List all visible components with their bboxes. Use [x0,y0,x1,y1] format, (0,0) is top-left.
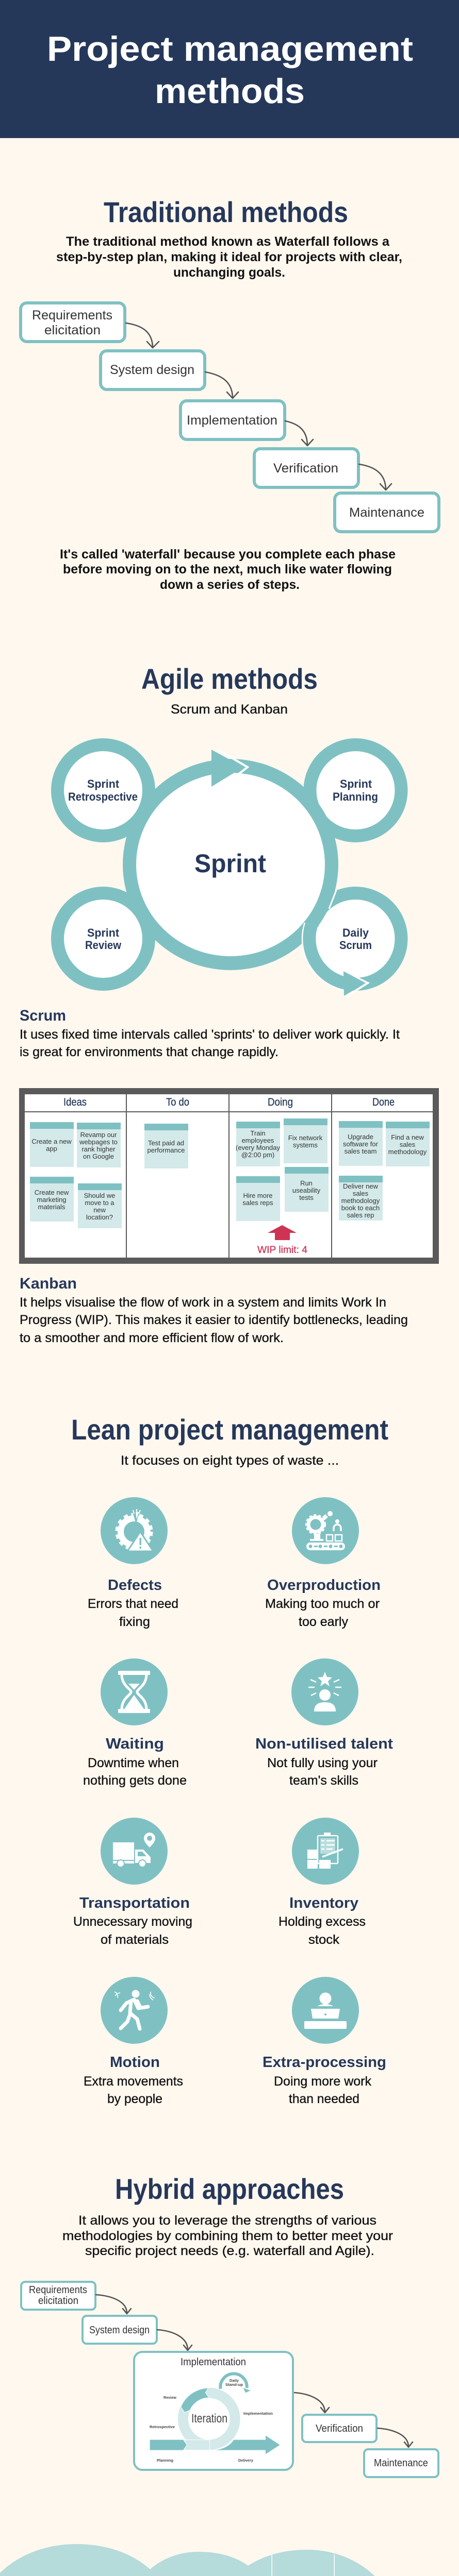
hybrid waterfall diagram: Maintenance [374,2458,428,2469]
call to action background: clouds and floor [0,2544,459,2576]
sprint cycle diagram: Scrum [339,939,372,952]
card: deliver methodology book: Deliver new [343,1182,379,1190]
waste: non-utilised talent: Not fully using your [267,1756,378,1770]
implementation panel: Implementation [243,2412,273,2416]
heading: kanban: Kanban [20,1275,77,1292]
sprint cycle diagram: Sprint [87,926,120,939]
text: waterfall intro: step-by-step plan, making it ideal for projects with clear, [56,250,402,264]
card: train employees: Train [250,1129,266,1137]
card: upgrade software [339,1121,383,1166]
text: hybrid description: methodologies by combining them to better meet your [62,2229,393,2243]
waste: non-utilised talent: Non-utilised talent [255,1736,393,1752]
waste: non-utilised talent: team's skills [289,1773,358,1788]
waste: motion: Motion [110,2054,160,2071]
card: usability tests [285,1167,329,1212]
waste: waiting: Waiting [106,1736,164,1752]
icon: person with star [291,1658,358,1725]
card: upgrade software: Upgrade [348,1133,373,1141]
text: waterfall intro: The traditional method known as Waterfall follows a [66,234,390,249]
waste: defects: Errors that need [88,1597,178,1611]
card: test paid ad: performance [147,1146,185,1154]
card: usability tests: Run [300,1179,313,1187]
card: train employees: employees [242,1137,274,1144]
kanban board: Ideas [63,1096,87,1108]
card: find sales methodology: methodology [388,1148,427,1156]
icon: clipboard and boxes [292,1818,359,1885]
card: train employees: (every Monday [236,1144,280,1151]
icon: broken gear with warning [101,1497,168,1564]
implementation panel: Stand-up [225,2383,243,2387]
implementation panel: Iteration [191,2412,227,2426]
text: kanban description: to a smoother and more efficient flow of work. [20,1331,284,1345]
waste: defects [88,1497,178,1629]
card: revamp webpages: webpages to [79,1138,118,1146]
waterfall diagram: System design [110,363,194,377]
waste: inventory: stock [308,1933,340,1947]
waste: overproduction: Overproduction [267,1577,381,1594]
card: fix network: systems [293,1141,318,1149]
title banner [0,0,459,138]
card: find sales methodology: Find a new [391,1133,424,1141]
text: hybrid description: specific project needs (e.g. waterfall and Agile). [85,2244,374,2258]
card: revamp webpages: Revamp our [80,1131,117,1139]
waste: motion: Extra movements [84,2074,183,2089]
card: usability tests: tests [299,1194,314,1201]
text: kanban description [20,1295,408,1345]
waste: overproduction: Making too much or [265,1597,380,1611]
waste: motion: by people [107,2092,162,2106]
waste: waiting [83,1658,187,1788]
subheading: eight types of waste: It focuses on eight types of waste ... [121,1453,339,1468]
sprint cycle diagram [51,738,407,996]
text: waterfall explanation: It's called 'waterfall' because you complete each phase [60,547,396,562]
text: hybrid description: It allows you to leverage the strengths of various [78,2213,376,2228]
waste: extra-processing: Extra-processing [263,2054,386,2071]
heading: lean project management: Lean project management [71,1413,388,1446]
waterfall diagram: Requirements [32,308,112,323]
card: find sales methodology [386,1122,430,1166]
kanban board: To do [166,1096,189,1108]
card: upgrade software: sales team [345,1147,376,1155]
card: test paid ad [144,1124,188,1168]
sprint cycle diagram: Planning [333,790,378,803]
icon: hourglass [101,1658,168,1725]
waste: extra-processing [263,1977,386,2106]
card: test paid ad: Test paid ad [148,1139,184,1147]
card: hire sales reps: Hire more [243,1192,273,1199]
card: upgrade software: software for [343,1140,379,1148]
hybrid waterfall diagram: System design [89,2325,150,2336]
icon: robot arm and conveyor [292,1497,359,1564]
implementation panel: Implementation [181,2357,246,2368]
icon: walking person [101,1977,168,2044]
waste: overproduction: too early [299,1615,348,1629]
sprint cycle diagram: Review [85,939,122,952]
icon: truck and pin [101,1818,168,1885]
card: deliver methodology book: book to each [341,1204,380,1212]
card: usability tests: useability [292,1187,321,1194]
card: hire sales reps [236,1176,280,1221]
waterfall diagram [21,303,439,532]
implementation panel: Planning [157,2459,173,2463]
sprint cycle diagram: Daily [342,926,369,939]
sprint cycle diagram: Sprint [87,777,120,790]
card: new location [78,1183,122,1228]
card: new location: Should we [84,1192,115,1199]
heading: scrum: Scrum [20,1007,66,1024]
card: revamp webpages: rank higher [81,1145,116,1153]
text: waterfall explanation: before moving on to the next, much like water flowing [63,562,392,577]
waste: transportation: of materials [101,1933,169,1947]
text: scrum description: is great for environments that change rapidly. [20,1045,278,1059]
card: create a new app: app [46,1145,57,1153]
card: find sales methodology: sales [400,1141,416,1148]
implementation panel: Retrospective [150,2426,175,2429]
waste: inventory: Inventory [289,1895,358,1911]
wip limit label: WIP limit: 4 [257,1245,307,1256]
implementation panel: Review [163,2396,177,2400]
sprint cycle diagram: Sprint [194,849,266,878]
waste: non-utilised talent [255,1658,393,1788]
waste: transportation: Transportation [79,1895,190,1911]
card: create a new app [30,1122,74,1167]
card: deliver methodology book: sales [353,1190,369,1197]
text: waterfall intro: unchanging goals. [173,265,285,280]
icon: person at laptop [292,1977,359,2044]
card: new location: location? [86,1213,113,1221]
waste: overproduction [265,1497,381,1629]
kanban board: Doing [268,1096,293,1108]
waste: extra-processing: Doing more work [274,2074,371,2089]
title banner: methods [155,72,305,111]
kanban board [19,1088,439,1264]
text: scrum description: It uses fixed time intervals called 'sprints' to deliver work quickly. It [20,1027,400,1042]
waste: transportation: Unnecessary moving [73,1914,192,1929]
text: waterfall explanation: down a series of steps. [160,578,300,592]
ceiling lamps [252,2554,356,2576]
waste: inventory [278,1818,366,1947]
waste: transportation [73,1818,192,1947]
text: waterfall intro [56,234,402,280]
card: fix network [284,1118,327,1163]
waste: inventory: Holding excess [278,1914,366,1929]
card: deliver methodology book [339,1176,383,1221]
waterfall diagram: Implementation [187,413,277,428]
text: waterfall explanation [60,547,396,592]
card: create a new app: Create a new [31,1138,72,1145]
hybrid waterfall diagram: elicitation [38,2295,78,2307]
title banner: Project management [47,29,413,69]
card: new location: new [93,1206,106,1214]
card: deliver methodology book: methodology [341,1197,380,1205]
card: deliver methodology book: sales rep [347,1211,374,1219]
implementation panel: Daily [230,2379,239,2383]
card: marketing materials: marketing [37,1196,67,1204]
hybrid waterfall diagram: Requirements [29,2284,87,2296]
card: train employees [236,1122,280,1166]
heading: agile methods: Agile methods [141,663,318,695]
text: hybrid description [62,2213,393,2258]
card: train employees: @2:00 pm) [241,1151,274,1159]
hybrid waterfall diagram: Verification [316,2423,363,2434]
waste: motion [84,1977,183,2106]
hybrid waterfall diagram [21,2282,438,2477]
iteration loop [150,2374,280,2454]
arrow: wip limit [268,1225,297,1240]
waste: defects: Defects [108,1577,162,1594]
card: marketing materials [30,1177,74,1222]
text: scrum description [20,1027,400,1059]
waterfall diagram: Maintenance [349,505,424,520]
waste: waiting: Downtime when [88,1756,179,1770]
waterfall diagram: Verification [273,461,338,476]
card: marketing materials: Create new [35,1189,69,1196]
subheading: scrum and kanban: Scrum and Kanban [171,702,288,717]
card: revamp webpages: on Google [83,1153,114,1160]
card: fix network: Fix network [288,1134,323,1142]
text: kanban description: It helps visualise the flow of work in a system and limits Work In [20,1295,386,1310]
implementation panel: Delivery [238,2459,253,2463]
card: marketing materials: materials [38,1203,65,1211]
waterfall diagram: elicitation [44,323,101,337]
waste: defects: fixing [119,1615,150,1629]
waste: extra-processing: than needed [289,2092,359,2106]
card: revamp webpages [77,1123,121,1167]
sprint cycle diagram: Retrospective [68,790,138,803]
heading: traditional methods: Traditional methods [104,196,348,228]
implementation panel [134,2352,293,2470]
card: hire sales reps: sales reps [242,1199,273,1207]
kanban board: Done [372,1096,395,1108]
waste: waiting: nothing gets done [83,1773,187,1788]
card: new location: move to a [85,1199,114,1207]
text: kanban description: Progress (WIP). This makes it easier to identify bottlenecks, leading [20,1313,408,1327]
heading: hybrid approaches: Hybrid approaches [115,2173,344,2205]
sprint cycle diagram: Sprint [340,777,372,790]
